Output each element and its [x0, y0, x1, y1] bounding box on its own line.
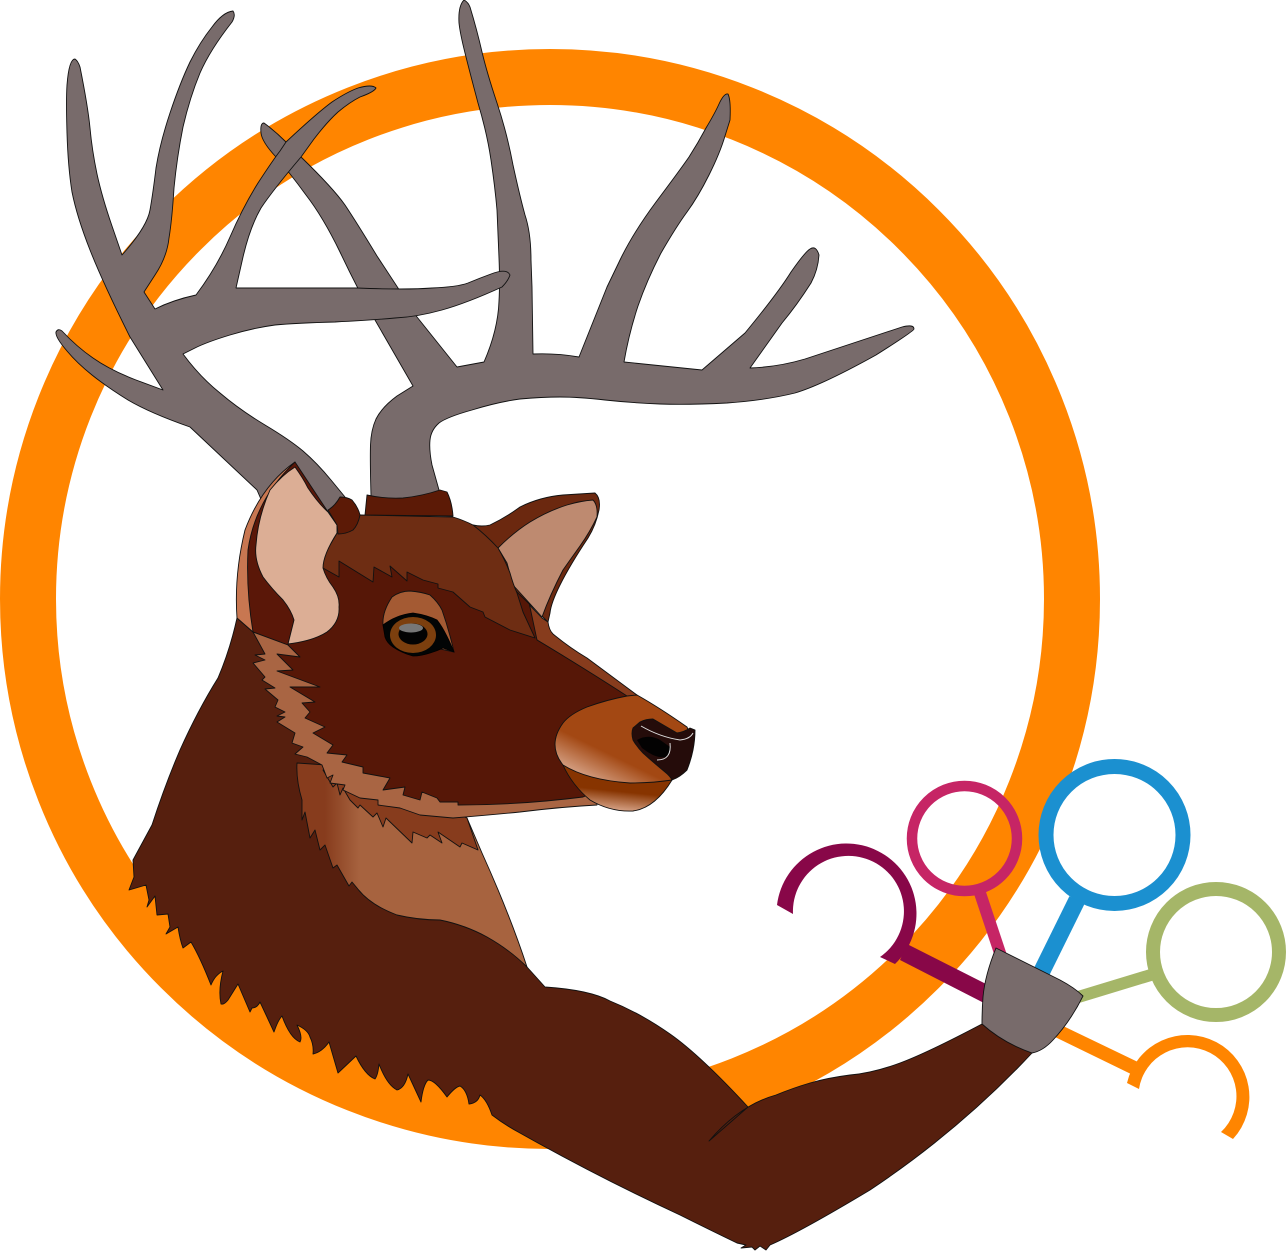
glass: blue	[1040, 766, 1183, 975]
eye patch	[383, 591, 454, 652]
glass: pink	[912, 786, 1017, 956]
nose highlights	[641, 726, 693, 760]
eye	[383, 591, 454, 656]
left ear dark	[248, 462, 330, 645]
cuff	[982, 948, 1083, 1053]
eye highlight	[399, 624, 423, 632]
iris	[390, 617, 436, 653]
deer body and arm	[129, 618, 1032, 1250]
orange ring	[28, 77, 1072, 1121]
head	[277, 540, 627, 805]
right ear inner	[498, 500, 597, 617]
neck fur shadow	[323, 770, 478, 850]
left antler	[56, 11, 510, 520]
glass: purple	[777, 844, 990, 1003]
right ear	[473, 493, 600, 622]
right antler	[261, 0, 914, 505]
left ear back	[236, 462, 330, 645]
magnifying glasses	[777, 766, 1279, 1139]
antler base left	[328, 497, 360, 534]
nose	[632, 719, 695, 780]
pupil	[398, 624, 428, 644]
glass: green	[1075, 889, 1279, 1015]
eye outline	[383, 613, 454, 656]
muzzle	[555, 695, 690, 783]
forehead	[323, 515, 535, 638]
chin	[563, 765, 672, 811]
nostril	[637, 737, 670, 757]
neck	[297, 763, 527, 967]
antler base right	[365, 490, 453, 516]
left ear inner	[256, 467, 339, 644]
glass: orange	[1055, 1025, 1249, 1139]
fur collar	[253, 632, 600, 818]
muzzle top strip	[517, 592, 637, 697]
